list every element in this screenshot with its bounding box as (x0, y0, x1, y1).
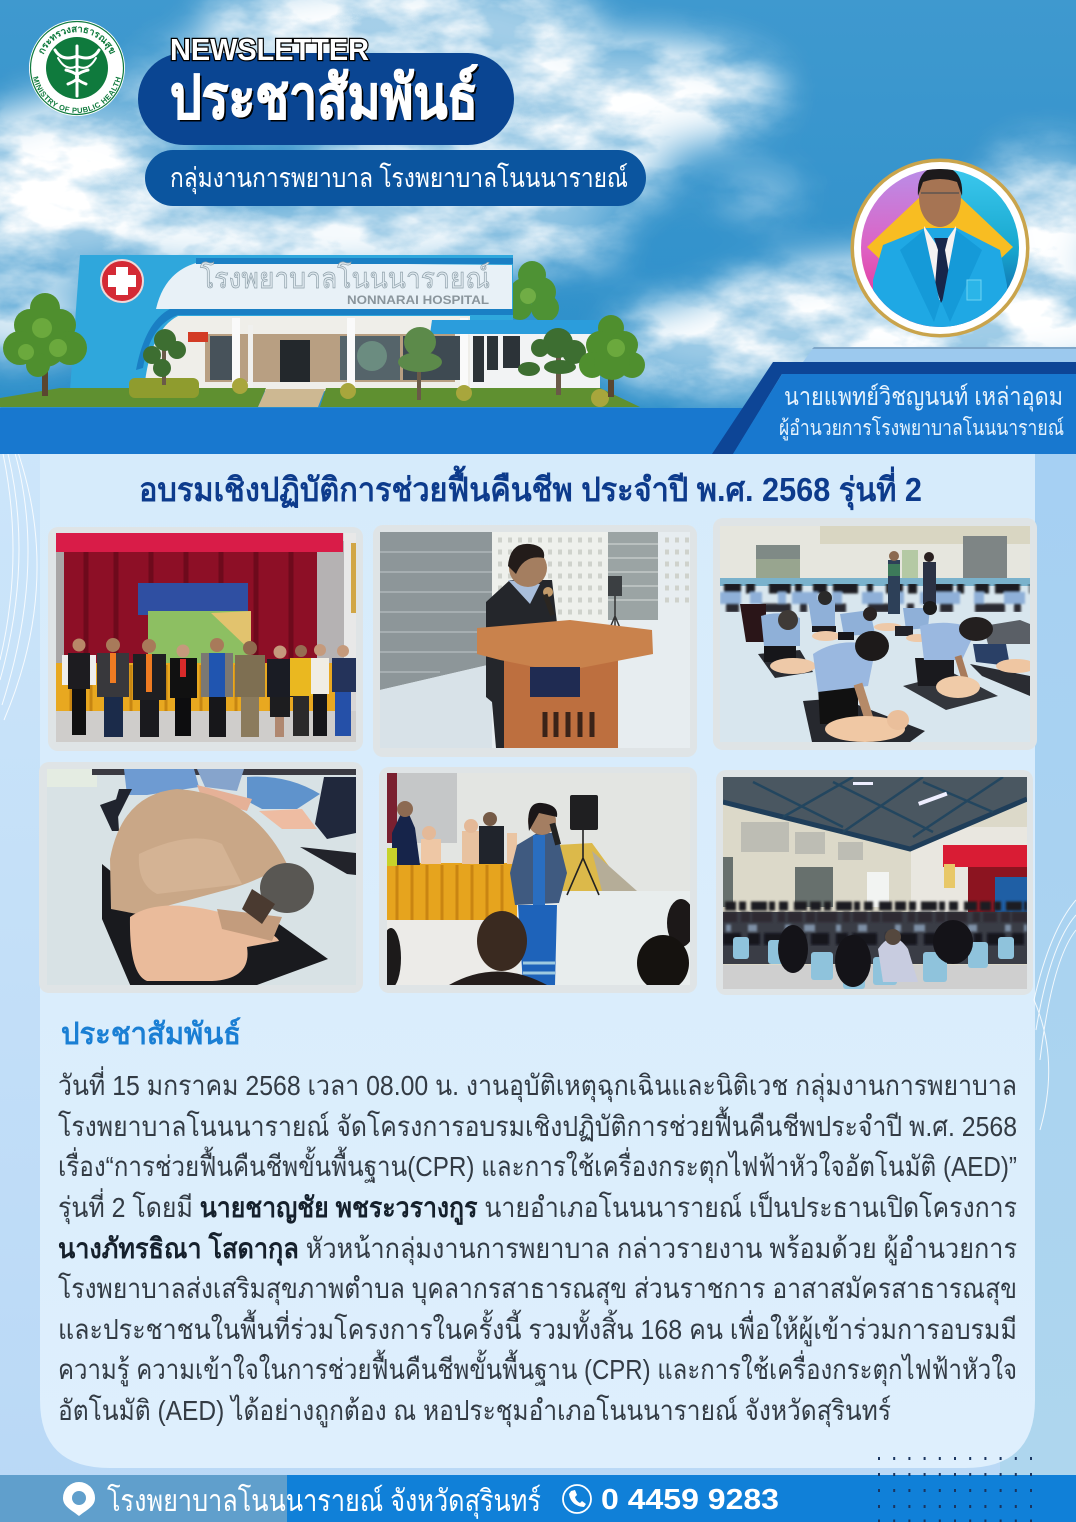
body paragraph: นางภัทรธิณา โสดากุล หัวหน้ากลุ่มงานการพยาบาล กล่าวรายงาน พร้อมด้วย ผู้อำนวยการ (58, 1231, 1017, 1266)
photo 2: speaker at podium (373, 525, 697, 757)
main heading: อบรมเชิงปฏิบัติการช่วยฟื้นคืนชีพ ประจำปี พ.ศ. 2568 รุ่นที่ 2 (139, 465, 922, 511)
footer address: โรงพยาบาลโนนนารายณ์ จังหวัดสุรินทร์ (107, 1483, 541, 1520)
instructors (888, 551, 936, 614)
stairs and stage corner (557, 843, 627, 891)
logo text: กระทรวงสาธารณสุข (39, 26, 116, 54)
body paragraph: รุ่นที่ 2 โดยมี นายชาญชัย พชระวรางกูร นายอำเภอโนนนารายณ์ เป็นประธานเปิดโครงการ (58, 1188, 1017, 1225)
section heading: ประชาสัมพันธ์ (61, 1017, 241, 1051)
hospital sign text (200, 261, 490, 307)
icon: phone (563, 1485, 591, 1513)
decorative dot grid (878, 1458, 1033, 1521)
right wing of building (430, 320, 604, 395)
hospital building (0, 255, 645, 407)
icon: location pin (63, 1482, 95, 1516)
sky background with clouds (0, 0, 1076, 408)
footer bar (0, 1475, 1076, 1522)
decorative arcs left (0, 408, 37, 720)
portrait of hospital director (850, 158, 1030, 338)
photo 1: group on stage (48, 527, 363, 751)
top blue bar (0, 408, 1076, 454)
logo text: MINISTRY OF PUBLIC HEALTH (33, 76, 121, 113)
right tree (579, 315, 645, 397)
photo 5: woman speaking with microphone (379, 767, 697, 993)
photo 4: man doing mouth-to-mouth on manikin (39, 762, 363, 993)
red cross emblem (101, 260, 143, 302)
blue wall and sign panel (70, 255, 513, 390)
hospital sign text: NONNARAI HOSPITAL (347, 293, 489, 307)
middle trainee (903, 617, 998, 710)
photo 6: audience in hall (716, 770, 1033, 995)
subtitle pill: กลุ่มงานการพยาบาล โรงพยาบาลโนนนารายณ์ (170, 162, 628, 195)
footer phone number: 0 4459 9283 (601, 1484, 779, 1516)
newsletter label: NEWSLETTER (170, 32, 369, 67)
decorative arcs right (1034, 900, 1076, 1130)
kneeling man (758, 610, 816, 678)
right trainee in grey (970, 620, 1036, 696)
body paragraph (58, 1066, 1017, 1428)
entrance with columns and glass (144, 316, 470, 392)
left tree (3, 293, 87, 396)
subtitle pill (145, 150, 646, 206)
body paragraph: อัตโนมัติ (AED) ได้อย่างถูกต้อง ณ หอประชุมอำเภอโนนนารายณ์ จังหวัดสุรินทร์ (58, 1394, 891, 1428)
title pill: ประชาสัมพันธ์: ประชาสัมพันธ์ (172, 66, 480, 133)
tree behind the building (508, 261, 559, 322)
title pill: ประชาสัมพันธ์: ประชาสัมพันธ์ (170, 64, 478, 131)
body background strips (0, 408, 1076, 1522)
topiary trees (143, 327, 586, 400)
title pill: ประชาสัมพันธ์ (138, 53, 514, 145)
photo 3: CPR practice in hall (713, 518, 1037, 750)
director name banner (712, 347, 1076, 454)
front trainee (803, 631, 925, 742)
seated audience (723, 906, 1027, 989)
logo caduceus (55, 46, 99, 96)
hospital sign text: โรงพยาบาลโนนนารายณ์ (200, 261, 490, 295)
lawn (0, 378, 640, 407)
logo text (33, 26, 121, 113)
ministry logo (29, 20, 125, 116)
back row trainees (740, 591, 937, 642)
